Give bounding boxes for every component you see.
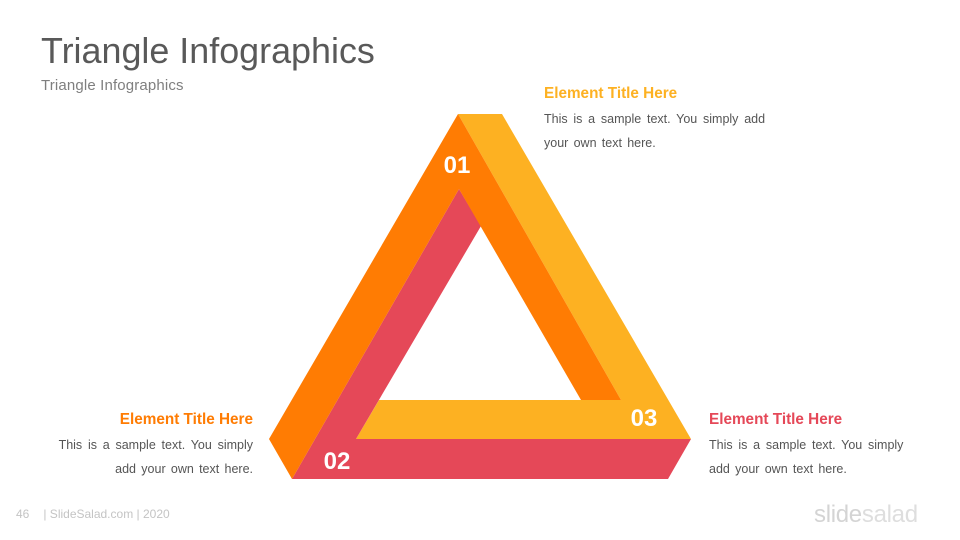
logo wordmark: slidesalad (814, 501, 918, 528)
callout 01 heading: Element Title Here (544, 85, 677, 102)
number 01: 01 (444, 152, 470, 179)
callout 01 text: your own text here. (544, 136, 656, 150)
number 03: 03 (631, 405, 657, 432)
number 02: 02 (324, 448, 350, 475)
title: Triangle Infographics (41, 31, 375, 71)
segment: red band (292, 189, 691, 479)
subtitle: Triangle Infographics (41, 77, 184, 94)
callout 02 heading: Element Title Here (120, 411, 253, 428)
callout 02 text: This is a sample text. You simply (59, 438, 253, 452)
footer page number and credit: 46 | SlideSalad.com | 2020 (16, 507, 170, 521)
callout 03 heading: Element Title Here (709, 411, 842, 428)
callout 03 text (709, 438, 904, 476)
segment: yellow band (356, 114, 691, 439)
callout 03 text: This is a sample text. You simply (709, 438, 903, 452)
callout 02 (58, 411, 253, 476)
callout 01 text (544, 112, 765, 150)
callout 01 text: This is a sample text. You simply add (544, 112, 765, 126)
callout 03 (709, 411, 904, 476)
callout 02 text: add your own text here. (115, 462, 253, 476)
callout 03 text: add your own text here. (709, 462, 847, 476)
callout 02 text (58, 438, 253, 476)
segment: orange band (269, 114, 621, 479)
callout 01 (544, 85, 765, 150)
